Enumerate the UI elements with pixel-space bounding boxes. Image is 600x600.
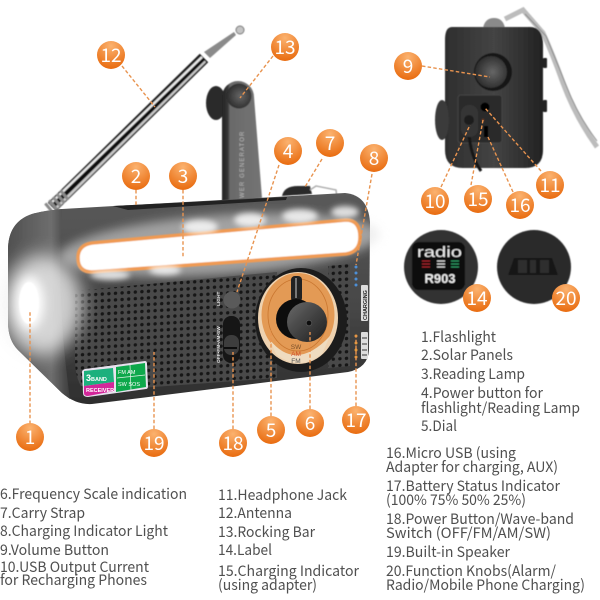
legend items 11 to 15: 11.Headphone Jack bbox=[218, 484, 347, 505]
legend items 11 to 15: (using adapter) bbox=[218, 574, 317, 595]
legend items 6 to 10: 7.Carry Strap bbox=[0, 502, 85, 523]
carry strap bbox=[505, 10, 597, 147]
badge 8: 8 bbox=[369, 144, 379, 171]
legend items 1 to 5: 4.Power button for bbox=[421, 382, 543, 403]
badge 10: 10 bbox=[424, 187, 446, 214]
dial: FM bbox=[291, 358, 301, 365]
LIGHT text: LIGHT bbox=[216, 292, 222, 306]
badge 7: 7 bbox=[325, 129, 335, 156]
side view of radio bbox=[435, 10, 597, 171]
reading lamp glow bbox=[58, 204, 382, 286]
function label sticker: SW SOS bbox=[118, 382, 140, 388]
reading lamp bbox=[78, 220, 360, 272]
right speaker grille bbox=[328, 264, 350, 368]
legend items 11 to 15: 12.Antenna bbox=[218, 502, 292, 523]
badge 17: 17 bbox=[345, 406, 367, 433]
dial: SW bbox=[291, 344, 302, 351]
legend items 16 to 20: 19.Built-in Speaker bbox=[386, 541, 510, 562]
badge 1 bbox=[16, 423, 44, 451]
legend items 6 to 10: 9.Volume Button bbox=[0, 539, 109, 560]
legend items 1 to 5: 2.Solar Panels bbox=[421, 344, 513, 365]
charging text: CHARGING bbox=[363, 290, 369, 320]
badge 12: 12 bbox=[100, 41, 122, 68]
badge 20: 20 bbox=[555, 284, 577, 311]
dial: AM bbox=[291, 351, 301, 358]
badge 8 bbox=[360, 144, 388, 172]
function knob close-up bbox=[497, 230, 571, 304]
dial bbox=[255, 268, 347, 372]
legend items 16 to 20: 20.Function Knobs(Alarm/ bbox=[386, 560, 556, 581]
legend items 16 to 20: 16.Micro USB (using bbox=[386, 442, 516, 463]
leader lines bbox=[30, 56, 541, 429]
legend items 11 to 15: 14.Label bbox=[218, 539, 272, 560]
badge 6: 6 bbox=[305, 409, 315, 436]
legend items 16 to 20: 17.Battery Status Indicator bbox=[386, 475, 560, 496]
legend items 16 to 20: Radio/Mobile Phone Charging) bbox=[386, 574, 585, 595]
battery status indicator bbox=[354, 332, 368, 359]
rocking bar crank bbox=[206, 81, 262, 203]
antenna bbox=[48, 26, 244, 209]
legend items 11 to 15: 13.Rocking Bar bbox=[218, 521, 315, 542]
legend items 1 to 5 bbox=[421, 326, 580, 436]
top clip bbox=[483, 18, 505, 28]
badge 4 bbox=[274, 137, 302, 165]
badge 19: 19 bbox=[143, 429, 165, 456]
badge 13: 13 bbox=[274, 33, 296, 60]
badge 11: 11 bbox=[539, 171, 561, 198]
badge 3: 3 bbox=[178, 162, 188, 189]
badge 2 bbox=[122, 162, 150, 190]
wave band switch bbox=[223, 316, 240, 363]
charging led bbox=[482, 119, 484, 121]
legend items 6 to 10: 6.Frequency Scale indication bbox=[0, 483, 187, 504]
badge 5: 5 bbox=[266, 416, 276, 443]
legend items 16 to 20: Switch (OFF/FM/AM/SW) bbox=[386, 522, 551, 543]
charging indicator light bbox=[354, 266, 358, 286]
number badges bbox=[16, 33, 580, 457]
badge 6 bbox=[296, 409, 324, 437]
radio body bbox=[2, 193, 382, 404]
headphone jack bbox=[480, 102, 490, 112]
micro USB port bbox=[484, 126, 488, 137]
badge 5 bbox=[257, 416, 285, 444]
flashlight bbox=[2, 255, 82, 355]
legend items 6 to 10 bbox=[0, 483, 187, 590]
function label sticker: FM AM bbox=[118, 370, 136, 376]
carry strap clip on top bbox=[282, 186, 337, 198]
legend items 16 to 20: (100% 75% 50% 25%) bbox=[386, 489, 526, 510]
speaker grille bbox=[75, 272, 277, 392]
badge 9 bbox=[394, 52, 422, 80]
legend items 1 to 5: flashlight/Reading Lamp bbox=[421, 397, 580, 418]
badge 2: 2 bbox=[131, 162, 141, 189]
legend items 6 to 10: 10.USB Output Current bbox=[0, 556, 150, 577]
switch label: OFF•FM•AM•SW bbox=[216, 326, 222, 363]
side dial bbox=[435, 100, 449, 140]
function label sticker bbox=[82, 361, 148, 397]
badge 1: 1 bbox=[25, 423, 35, 450]
legend items 16 to 20: Adapter for charging, AUX) bbox=[386, 456, 558, 477]
lamp light blotches bbox=[90, 206, 359, 280]
badge 7 bbox=[316, 129, 344, 157]
badge 18: 18 bbox=[222, 429, 244, 456]
charging text bbox=[361, 285, 369, 321]
power button for light bbox=[224, 292, 240, 308]
legend items 1 to 5: 1.Flashlight bbox=[421, 326, 496, 347]
function label sticker: RECEIVER bbox=[86, 388, 114, 394]
radio label close-up: radio bbox=[417, 244, 462, 261]
legend items 16 to 20 bbox=[386, 442, 585, 595]
function label sticker: 3BAND bbox=[86, 373, 107, 383]
badge 14: 14 bbox=[466, 284, 488, 311]
legend items 16 to 20: 18.Power Button/Wave-band bbox=[386, 508, 574, 529]
legend items 11 to 15: 15.Charging Indicator bbox=[218, 560, 359, 581]
badge 9: 9 bbox=[403, 52, 413, 79]
badge 3 bbox=[169, 162, 197, 190]
USB plug and cable bbox=[461, 105, 481, 171]
radio label close-up bbox=[404, 230, 478, 304]
radio label close-up: R903 bbox=[424, 271, 456, 286]
legend items 1 to 5: 5.Dial bbox=[421, 415, 457, 436]
port panel bbox=[458, 95, 502, 143]
volume button bbox=[474, 53, 512, 91]
legend items 6 to 10: for Recharging Phones bbox=[0, 569, 147, 590]
badge 16: 16 bbox=[509, 191, 531, 218]
solar panels bbox=[113, 197, 287, 210]
badge 4: 4 bbox=[283, 137, 293, 164]
side body bbox=[445, 27, 543, 168]
legend items 1 to 5: 3.Reading Lamp bbox=[421, 363, 525, 384]
rocking bar crank: WER GENERATOR bbox=[240, 131, 246, 198]
legend items 11 to 15 bbox=[218, 484, 359, 595]
legend items 6 to 10: 8.Charging Indicator Light bbox=[0, 520, 169, 541]
badge 15: 15 bbox=[467, 185, 489, 212]
